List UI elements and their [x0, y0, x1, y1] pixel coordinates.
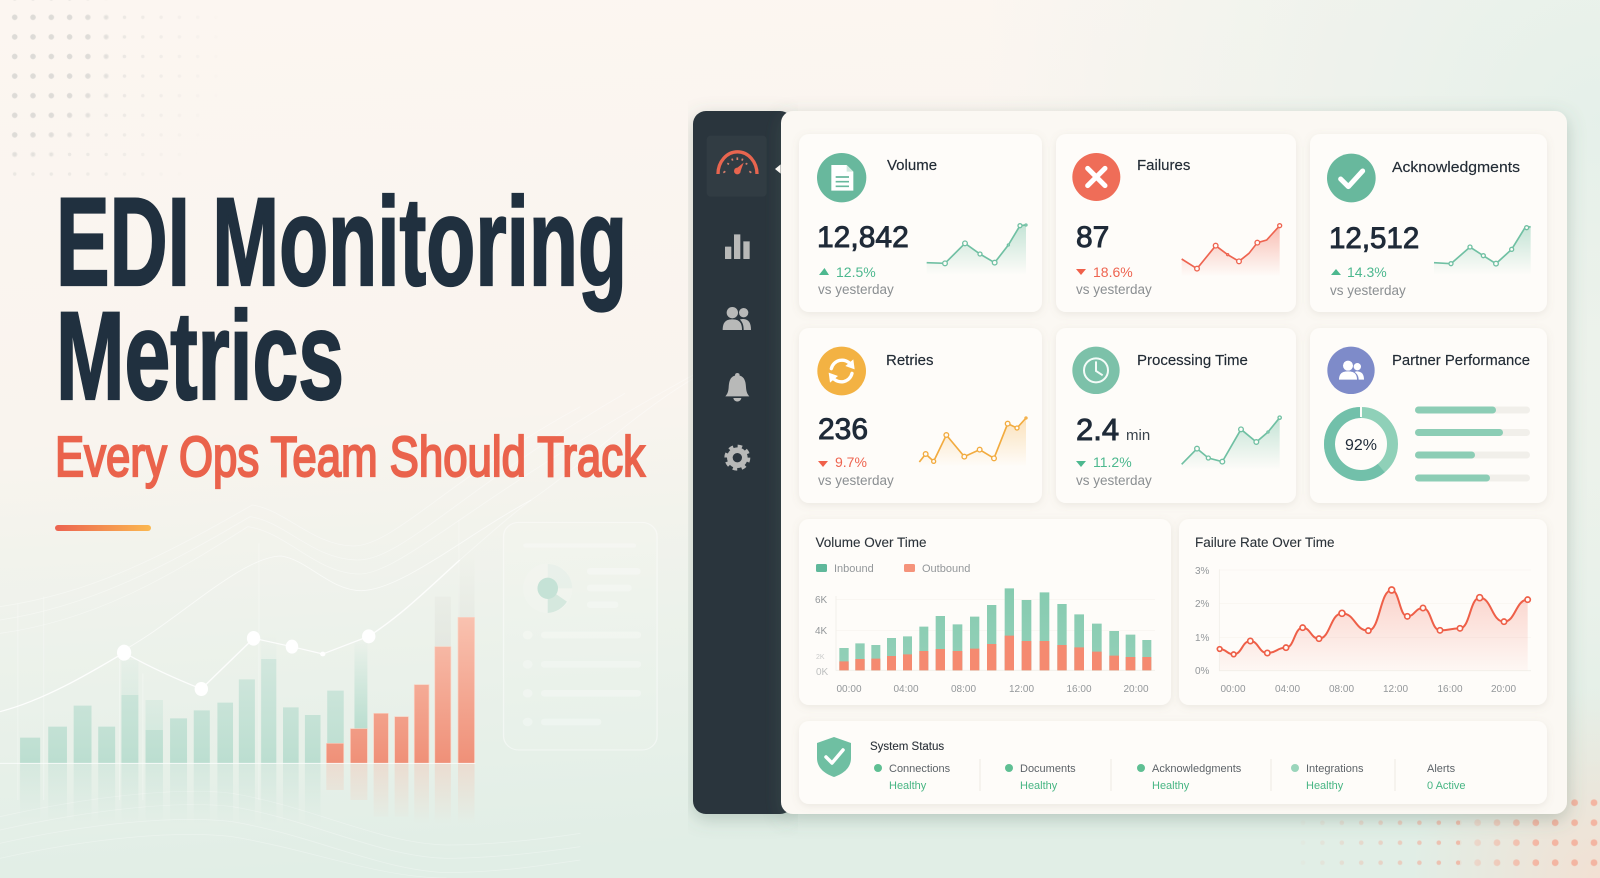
faded bar ghosts: [121, 633, 276, 730]
status: acknowledgments: Acknowledgments: [1152, 763, 1242, 775]
line chart: 20:00: [1491, 684, 1516, 695]
card: partner performance: [1310, 328, 1547, 503]
sidebar icons: [707, 136, 781, 469]
icon: partners: [1327, 347, 1375, 394]
contour lines: [0, 373, 696, 878]
bar chart: 16:00: [1066, 684, 1092, 695]
active notch: [775, 164, 781, 174]
panel: system status: [799, 721, 1547, 804]
dot pattern: bottom right: [1320, 799, 1598, 866]
legend: Outbound: [922, 563, 970, 575]
sparkline: retries: [919, 417, 1027, 467]
card: retries: 9.7%: [835, 454, 867, 470]
card: processing time: 11.2%: [1093, 454, 1132, 470]
sparkline: volume: [927, 224, 1027, 275]
icon: check: [1327, 154, 1376, 202]
dividers: [980, 759, 1395, 791]
card: failures: [1056, 134, 1296, 312]
card: retries: [799, 328, 1042, 503]
card: acknowledgments: [1310, 134, 1547, 312]
line chart: 3%: [1195, 566, 1210, 577]
dot pattern: top left: [12, 0, 162, 176]
active item highlight: [707, 136, 767, 197]
ghost dashboard card: [504, 522, 657, 750]
bar chart: 04:00: [893, 684, 919, 695]
icon: gauge: [718, 152, 757, 174]
line chart: 16:00: [1437, 684, 1463, 695]
bar chart: 6K: [815, 595, 828, 606]
card: retries: 236: [818, 413, 868, 446]
card: acknowledgments: 14.3%: [1347, 264, 1387, 280]
panel: volume over time: Volume Over Time: [816, 535, 927, 550]
line chart: 1%: [1195, 633, 1210, 644]
dashboard: [693, 111, 1567, 814]
card: volume: Volume: [887, 157, 937, 174]
panel: volume over time: [799, 519, 1171, 705]
subtitle: Every Ops Team Should Track: [55, 425, 645, 489]
status: integrations: [1291, 763, 1364, 792]
card: retries: vs yesterday: [818, 473, 894, 488]
legend: Inbound: [834, 563, 874, 575]
bar chart: 08:00: [951, 684, 976, 695]
line chart: 04:00: [1275, 684, 1300, 695]
status: acknowledgments: Healthy: [1152, 780, 1190, 792]
metric value: [1076, 412, 1150, 447]
status: acknowledgments: [1137, 763, 1242, 792]
sidebar: [693, 111, 793, 814]
metric value: 2.4: [1076, 412, 1119, 447]
card: volume: [799, 134, 1042, 312]
status: connections: Healthy: [889, 780, 927, 792]
status: connections: [874, 763, 951, 792]
icon: bar chart: [725, 234, 750, 259]
sparkline: failures: [1182, 224, 1282, 277]
panel: system status: System Status: [870, 741, 944, 753]
title: Metrics: [56, 287, 344, 426]
bar chart: 0K: [816, 667, 829, 678]
card: acknowledgments: Acknowledgments: [1392, 159, 1520, 176]
icon: document: [817, 153, 866, 202]
card: partner performance: Partner Performance: [1392, 352, 1530, 369]
icon: users: [723, 307, 751, 330]
bar reflections: [20, 764, 321, 823]
bar chart: 4K: [815, 626, 828, 637]
card: retries: Retries: [886, 352, 934, 369]
bar chart: 20:00: [1123, 684, 1149, 695]
donut chart: 92%: [1345, 437, 1377, 454]
icon: gear: [726, 447, 748, 469]
status: documents: [1005, 763, 1076, 792]
icon: failure cross: [1072, 153, 1120, 201]
status: alerts: Alerts: [1427, 763, 1456, 775]
status: integrations: Integrations: [1306, 763, 1364, 775]
accent bar: [55, 525, 151, 531]
line chart: [1195, 566, 1531, 695]
legend: [816, 563, 970, 575]
line chart: 12:00: [1383, 684, 1408, 695]
main panel: [781, 111, 1567, 814]
card: failures: 18.6%: [1093, 264, 1133, 280]
bar chart: 00:00: [836, 684, 862, 695]
card: processing time: [1056, 328, 1296, 503]
vertical lines: [18, 520, 459, 800]
icon: clock: [1072, 347, 1120, 394]
card: failures: Failures: [1137, 157, 1190, 174]
red bars: [326, 617, 475, 763]
sparkline: processing time: [1182, 416, 1281, 470]
bar chart: 12:00: [1009, 684, 1034, 695]
line chart: 2%: [1195, 599, 1210, 610]
bar chart: 2K: [816, 654, 825, 661]
status: connections: Connections: [889, 763, 951, 775]
card: failures: 87: [1076, 221, 1109, 254]
card: acknowledgments: 12,512: [1329, 222, 1419, 255]
status: integrations: Healthy: [1306, 780, 1344, 792]
icon: shield: [817, 737, 851, 777]
decorative background chart: [0, 373, 696, 878]
sparkline: acknowledgments: [1434, 226, 1531, 275]
panel: failure rate over time: Failure Rate Over Time: [1195, 535, 1335, 550]
title: [56, 173, 627, 426]
panel: failure rate over time: [1179, 519, 1547, 705]
card: processing time: vs yesterday: [1076, 473, 1152, 488]
line chart: 00:00: [1220, 684, 1246, 695]
card: processing time: Processing Time: [1137, 352, 1248, 369]
bar chart: [815, 588, 1155, 695]
card: volume: vs yesterday: [818, 282, 894, 297]
line chart: 08:00: [1329, 684, 1354, 695]
status: documents: Healthy: [1020, 780, 1058, 792]
card: volume: 12,842: [817, 221, 909, 254]
status: alerts: [1427, 763, 1466, 792]
card: acknowledgments: vs yesterday: [1330, 283, 1406, 298]
status: alerts: 0 Active: [1427, 780, 1466, 792]
metric value: min: [1126, 427, 1150, 444]
title: EDI Monitoring: [56, 173, 627, 312]
trend lines and markers: [0, 377, 696, 712]
baseline: [0, 762, 475, 765]
icon: retry arrows: [817, 347, 866, 395]
card: volume: 12.5%: [836, 264, 876, 280]
partner bars: [1415, 406, 1530, 482]
icon: bell: [725, 373, 749, 401]
card: failures: vs yesterday: [1076, 282, 1152, 297]
donut chart: [1330, 406, 1392, 476]
status: documents: Documents: [1020, 763, 1076, 775]
green bars: [20, 659, 344, 763]
line chart: 0%: [1195, 666, 1210, 677]
